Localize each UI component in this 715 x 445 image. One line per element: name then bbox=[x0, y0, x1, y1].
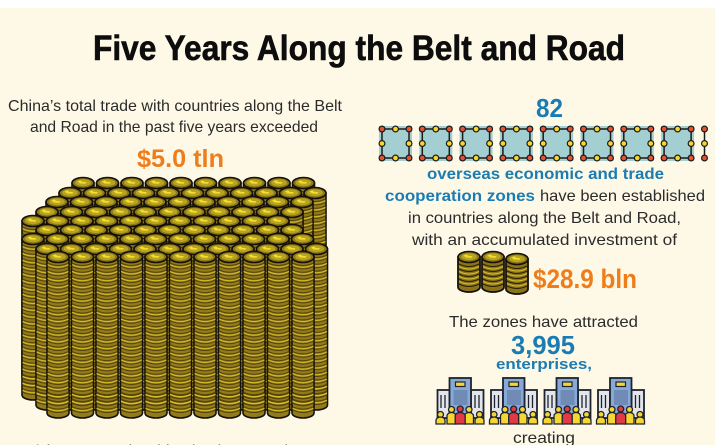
text: zones description: with an accumulated investment of bbox=[411, 232, 678, 249]
text: zones description: overseas economic and trade bbox=[427, 166, 664, 183]
icon: zone row bbox=[379, 126, 707, 161]
icon: coin stacks bbox=[22, 178, 328, 418]
text: trade description: China’s total trade with countries along the Belt bbox=[8, 98, 343, 115]
panel: total trade bbox=[8, 98, 343, 445]
text: trade description: and Road in the past five years exceeded bbox=[30, 119, 318, 136]
text: trade description bbox=[8, 98, 343, 136]
text: zones description: cooperation zones bbox=[385, 188, 535, 205]
text: enterprises: enterprises, bbox=[496, 356, 592, 373]
icon: enterprise buildings bbox=[436, 378, 644, 424]
figure: 3,995: 3,995 bbox=[511, 330, 575, 360]
icon: three coin stacks bbox=[458, 252, 528, 294]
figure: 82: 82 bbox=[536, 93, 563, 123]
panel: cooperation zones bbox=[379, 93, 707, 445]
text: zones description: in countries along the Belt and Road, bbox=[408, 210, 681, 227]
title: Five Years Along the Belt and Road bbox=[93, 29, 625, 68]
text: zones description: have been established bbox=[540, 188, 705, 205]
text: zones attracted: The zones have attracted bbox=[449, 314, 638, 331]
figure: $5.0 tln: $5.0 tln bbox=[137, 145, 224, 173]
text: zones description bbox=[385, 166, 705, 249]
figure: $28.9 bln: $28.9 bln bbox=[533, 264, 637, 294]
